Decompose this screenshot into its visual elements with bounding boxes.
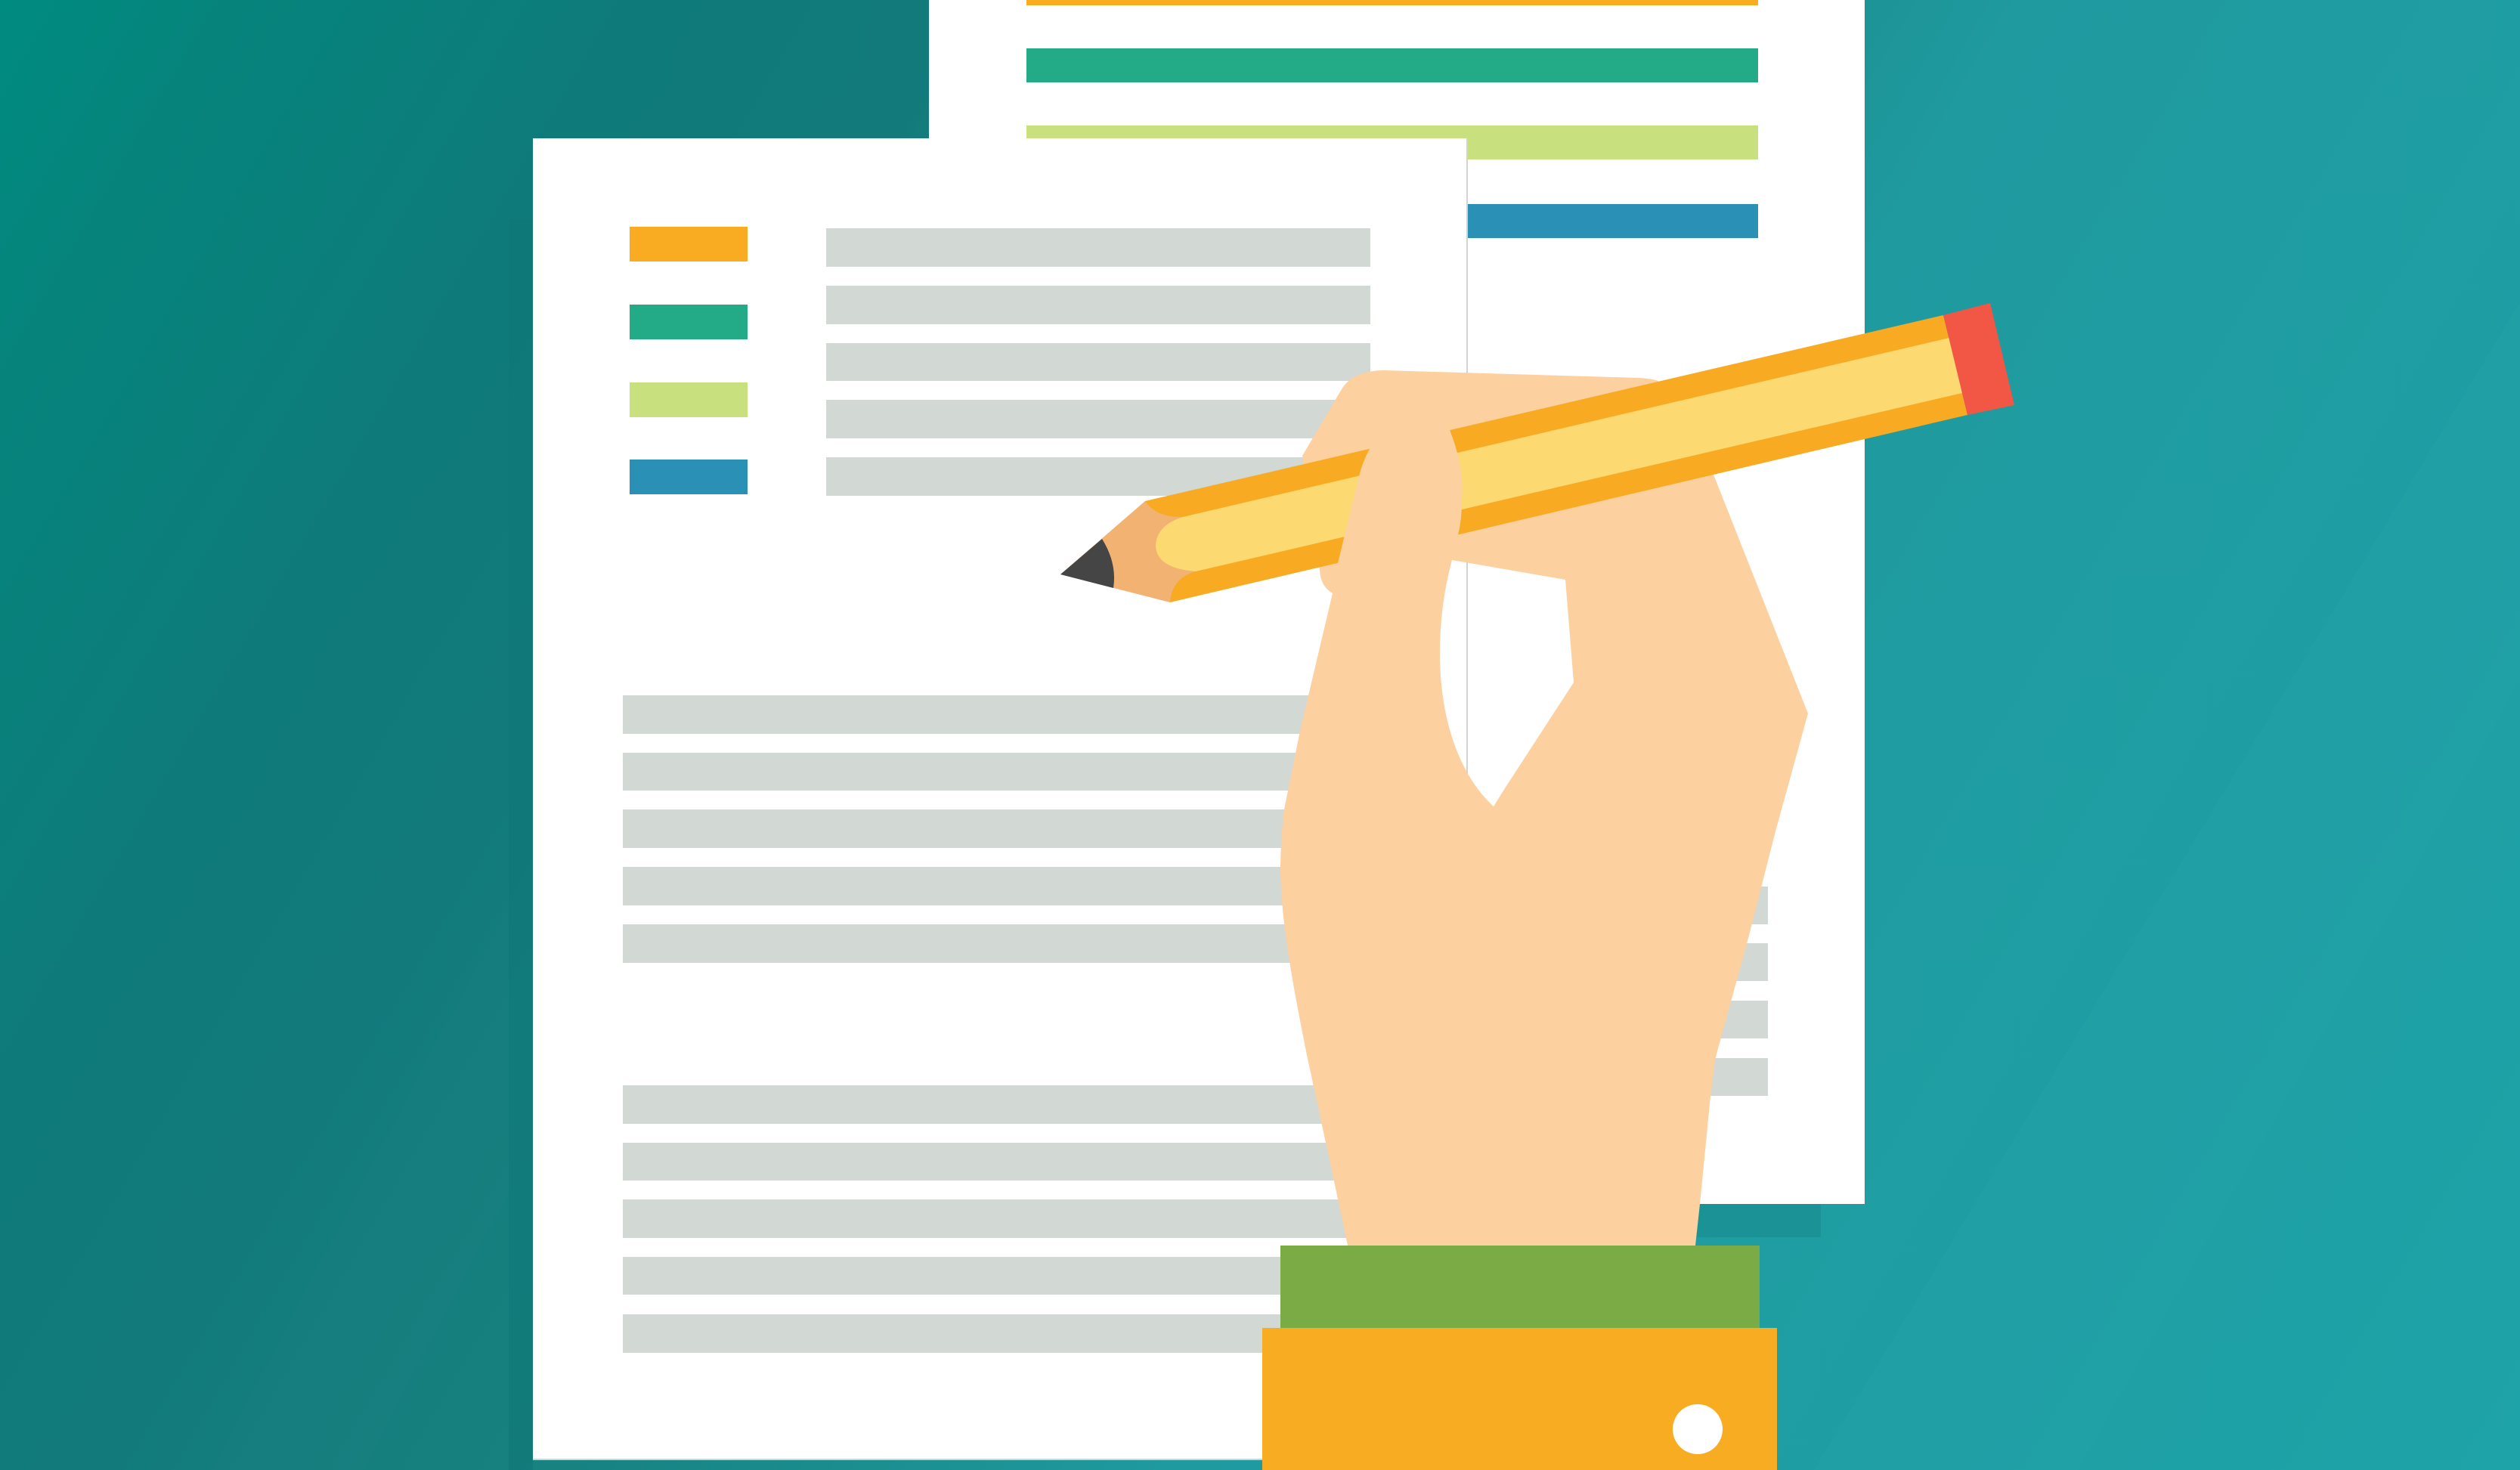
pencil wood tip [1060,501,1196,602]
back sheet text lines [1663,887,1768,1096]
front sheet text lines: bottom block [623,1085,1379,1353]
jacket cuff [1262,1328,1777,1470]
finger over pencil [1338,408,1463,582]
back sheet colour bar: green [1026,48,1758,82]
pencil eraser [1943,303,2014,415]
back sheet colour bar: lime [1026,125,1758,159]
pencil body [1145,315,1967,602]
pencil yellow stripe [1156,338,1962,571]
pencil lead [1060,539,1114,588]
back sheet colour bar: blue [1026,204,1758,238]
front sheet colour key: blue [630,460,748,494]
back sheet colour bar: orange [1026,0,1758,5]
pencil [1060,303,2014,602]
back sheet [929,0,1865,1204]
hand [1280,370,1808,1246]
shadow: back sheet [1663,1204,1821,1237]
front sheet colour key: orange [630,227,748,262]
front sheet text lines: top block [826,228,1370,496]
front sheet text lines: middle block [623,695,1348,963]
shadow: front sheet [509,219,533,1470]
front sheet colour key: lime [630,382,748,417]
cuff button [1673,1404,1723,1454]
front sheet [533,138,1468,1460]
front sheet colour key: green [630,305,748,339]
shirt sleeve [1280,1246,1760,1329]
